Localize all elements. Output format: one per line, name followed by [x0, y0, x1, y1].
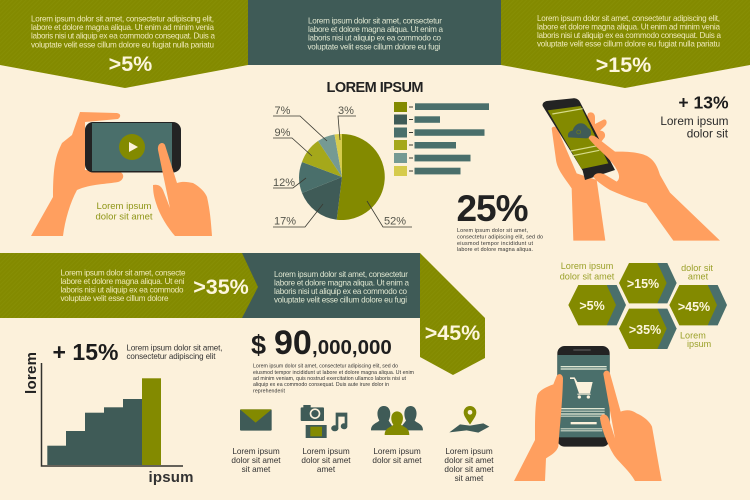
illustration: hands holding phone with cloud	[543, 98, 720, 241]
pie chart: 7%	[274, 105, 291, 117]
panel: middle teal band: Lorem ipsum dolor sit amet, consectetur	[274, 270, 408, 279]
stat: +15% with caption: Lorem ipsum dolor sit amet,	[126, 344, 222, 352]
panel: top middle banner: labore et dolore magna aliqua. Ut enim a	[308, 25, 443, 34]
panel: top left banner: labore et dolore magna aliqua. Ut enim ad minim venia	[31, 23, 214, 32]
panel: olive hexagon arrow 45%: >45%	[425, 321, 480, 345]
panel: middle teal band: labore et dolore magna aliqua. Ut enim a	[274, 278, 409, 288]
stat: +13%: dolor sit	[687, 126, 729, 140]
hexagon cluster: Lorem	[680, 330, 706, 340]
panel: olive hexagon arrow 45%	[420, 253, 485, 375]
hexagon cluster: dolor sit amet	[560, 272, 615, 282]
pie chart: 52%	[384, 216, 406, 228]
panel: top right banner: Lorem ipsum dolor sit amet, consectetur adipiscing elit,	[537, 14, 720, 23]
panel: top right banner: labore et dolore magna aliqua. Ut enim ad minim venia	[537, 22, 720, 32]
panel: top middle banner: voluptate velit esse cillum dolore eu fugi	[308, 42, 441, 51]
panel: top left banner: Lorem ipsum dolor sit amet, consectetur adipiscing elit,	[31, 14, 214, 24]
text: left caption: dolor sit amet	[95, 212, 153, 222]
heading: pie chart title: LOREM IPSUM	[326, 80, 424, 96]
panel: middle olive band: voluptate velit esse cillum dolore	[60, 294, 169, 303]
stat: +15% with caption	[52, 339, 222, 365]
icon captions: Lorem ipsum	[445, 447, 493, 456]
hexagon cluster: >45%	[678, 300, 710, 314]
pie chart: 12%	[273, 177, 295, 189]
panel: top left banner: >5%	[109, 52, 152, 76]
stat: 90,000,000	[251, 324, 414, 394]
icon captions: dolor sit amet	[231, 456, 281, 465]
stat: 90,000,000: 90	[274, 324, 312, 362]
illustration: hands holding phone with shopping cart	[514, 346, 662, 481]
icon captions: dolor sit amet	[444, 456, 494, 465]
panel: top middle banner: laboris nisi ut aliquip ex ea commodo co	[308, 34, 441, 43]
stat: 90,000,000: reprehenderit	[253, 388, 286, 394]
icon: map pin	[449, 406, 489, 433]
stat: 90,000,000: ad minim veniam, quis nostrud exercitation ullamco laboris nisi ut	[253, 376, 407, 382]
stat: +13%: Lorem ipsum	[660, 114, 729, 128]
stat: 90,000,000: eiusmod tempor incididunt ut labore et dolore magna aliqua. Ut enim	[253, 370, 414, 376]
hexagon cluster	[560, 261, 727, 349]
panel: top left banner: voluptate velit esse cillum dolore eu fugiat nulla pariatu	[31, 40, 214, 49]
panel: top right banner	[501, 0, 750, 88]
hexagon cluster: >5%	[579, 299, 605, 313]
panel: top right banner: >15%	[596, 53, 651, 77]
stat: 90,000,000: Lorem ipsum dolor sit amet, consectetur adipiscing elit, sed do	[253, 364, 398, 370]
stat: 25% with text	[456, 188, 543, 253]
illustration: hands holding phone with video	[31, 112, 212, 236]
panel: top right banner: laboris nisi ut aliquip ex ea commodo consequat. Duis a	[537, 31, 721, 40]
panel: top right banner: voluptate velit esse cillum dolore eu fugiat nulla pariatu	[537, 40, 720, 49]
stat: 25% with text: consectetur adipiscing elit, sed do	[457, 234, 543, 240]
icon captions	[231, 447, 494, 483]
text: left caption: Lorem ipsum	[97, 201, 152, 212]
panel: top middle banner	[248, 0, 501, 65]
pie chart	[273, 105, 412, 228]
panel: middle teal band	[240, 253, 420, 318]
stat: 90,000,000: ,000,000	[312, 336, 392, 359]
hexagon cluster: >35%	[629, 323, 661, 337]
pie chart: 3%	[338, 105, 354, 117]
stat: +13%	[660, 92, 729, 140]
panel: top left banner: laboris nisi ut aliquip ex ea commodo consequat. Duis a	[31, 32, 215, 41]
hexagon cluster: dolor sit	[681, 263, 713, 273]
icon captions: amet	[317, 465, 336, 474]
stat: +13%: + 13%	[678, 92, 729, 112]
stat: +15% with caption: consectetur adipiscing elit	[126, 352, 216, 361]
bar chart: lorem	[23, 352, 40, 394]
stat: +15% with caption: + 15%	[52, 339, 118, 365]
stat: 25% with text: labore et dolore magna aliqua.	[457, 247, 533, 253]
hexagon cluster: ipsum	[687, 339, 711, 349]
panel: middle teal band: voluptate velit esse cillum dolore eu fugi	[274, 296, 407, 304]
panel: middle olive band	[0, 253, 258, 318]
icon: envelope	[240, 409, 272, 431]
panel: top middle banner: Lorem ipsum dolor sit amet, consectetur	[308, 16, 442, 26]
legend with bars	[394, 102, 489, 176]
panel: middle olive band: Lorem ipsum dolor sit amet, consecte	[60, 268, 186, 278]
icon captions: Lorem ipsum	[232, 447, 280, 456]
stat: 90,000,000: $	[251, 330, 266, 360]
stat: 25% with text: 25%	[456, 188, 528, 229]
stat: 25% with text: Lorem ipsum dolor sit amet,	[457, 228, 528, 234]
pie chart: 17%	[274, 216, 296, 228]
hexagon cluster: >15%	[627, 277, 659, 291]
panel: middle teal band: laboris nisi ut aliquip ex ea commodo co	[274, 287, 407, 296]
pie chart: 9%	[274, 127, 291, 139]
icon captions: dolor sit amet	[372, 456, 422, 465]
bar chart: ipsum	[148, 469, 194, 486]
icon captions: sit amet	[455, 474, 484, 483]
icon captions: dolor sit amet	[444, 465, 494, 474]
bar chart	[23, 352, 194, 486]
icon captions: sit amet	[242, 465, 271, 474]
hexagon cluster: Lorem ipsum	[561, 261, 613, 271]
icon: camera, film and music	[301, 405, 347, 438]
panel: top left banner	[0, 0, 248, 88]
icon captions: dolor sit amet	[301, 456, 351, 465]
stat: 25% with text: eiusmod tempor incididunt ut	[457, 241, 534, 247]
icon captions: Lorem ipsum	[373, 447, 421, 456]
panel: middle olive band: laboris nisi ut aliquip ex ea commodo	[60, 286, 184, 294]
hexagon cluster: amet	[688, 272, 709, 282]
stat: 90,000,000: aliquip ex ea commodo consequat. Duis aute irure dolor in	[253, 382, 389, 388]
panel: middle olive band: labore et dolore magna aliqua. Ut eni	[60, 277, 185, 286]
icon captions: Lorem ipsum	[302, 447, 350, 456]
icon: group of people	[371, 406, 423, 435]
panel: middle olive band: >35%	[193, 275, 249, 299]
